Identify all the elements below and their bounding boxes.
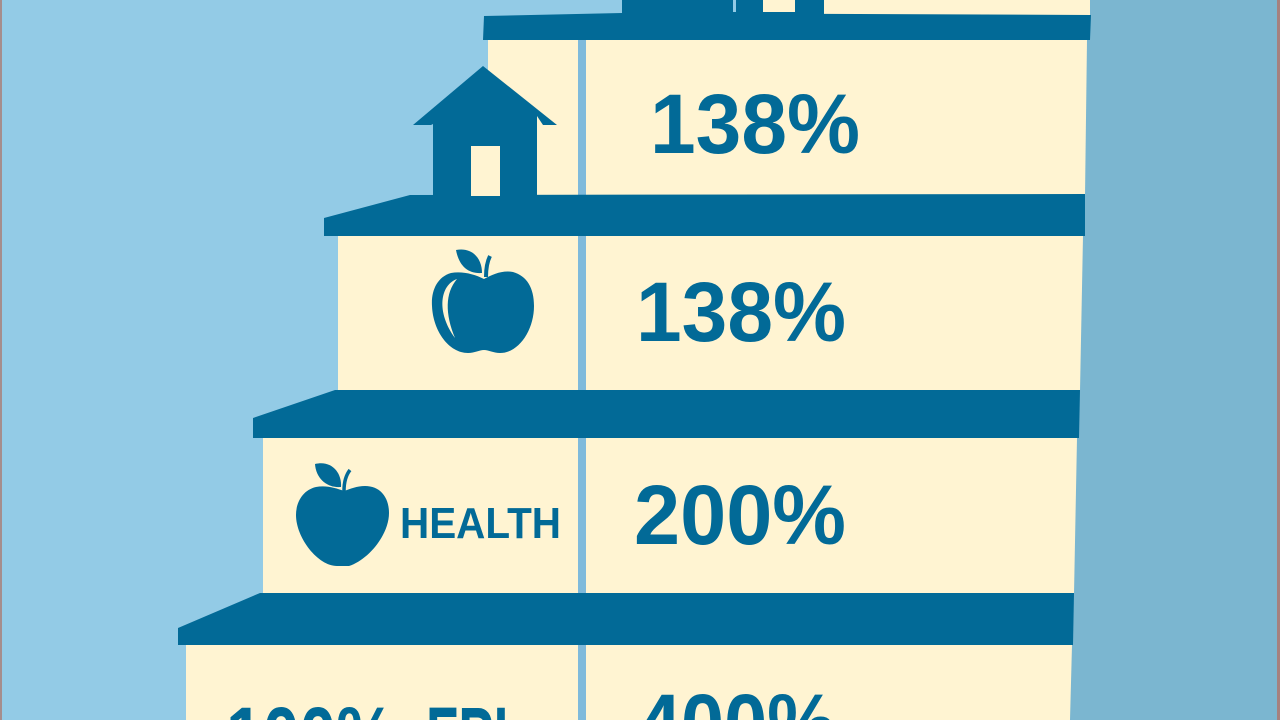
- shelf 1: [483, 13, 1091, 40]
- icon: apple: [432, 250, 534, 353]
- shelf 3: [253, 390, 1080, 438]
- icon: house: [413, 66, 557, 196]
- shelf 4: [178, 593, 1074, 645]
- top step: cropped house: [622, 0, 1090, 15]
- value: 200%: 200%: [634, 468, 846, 562]
- shelf 2: [324, 194, 1085, 236]
- value: 138% upper: 138%: [650, 77, 860, 171]
- value: 138% lower: 138%: [636, 265, 846, 359]
- label: HEALTH: HEALTH: [400, 499, 561, 548]
- icon: apple with leaf: [296, 463, 389, 566]
- staircase cream blocks: [186, 40, 1087, 720]
